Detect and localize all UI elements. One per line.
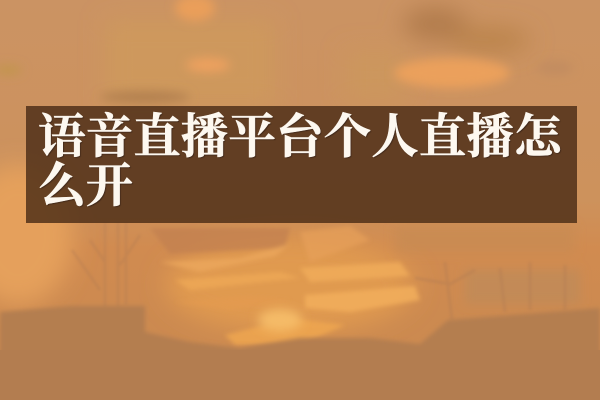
foreground haze ground (0, 306, 600, 400)
right distant treeline (395, 225, 580, 304)
upper clouds (105, 8, 530, 105)
title: 语音直播平台个人直播怎么开 (38, 112, 562, 213)
title band (26, 106, 577, 223)
tree silhouettes (72, 222, 565, 320)
sunset streaks (150, 226, 420, 345)
left side glow (0, 165, 73, 305)
sunset glow (165, 237, 415, 333)
